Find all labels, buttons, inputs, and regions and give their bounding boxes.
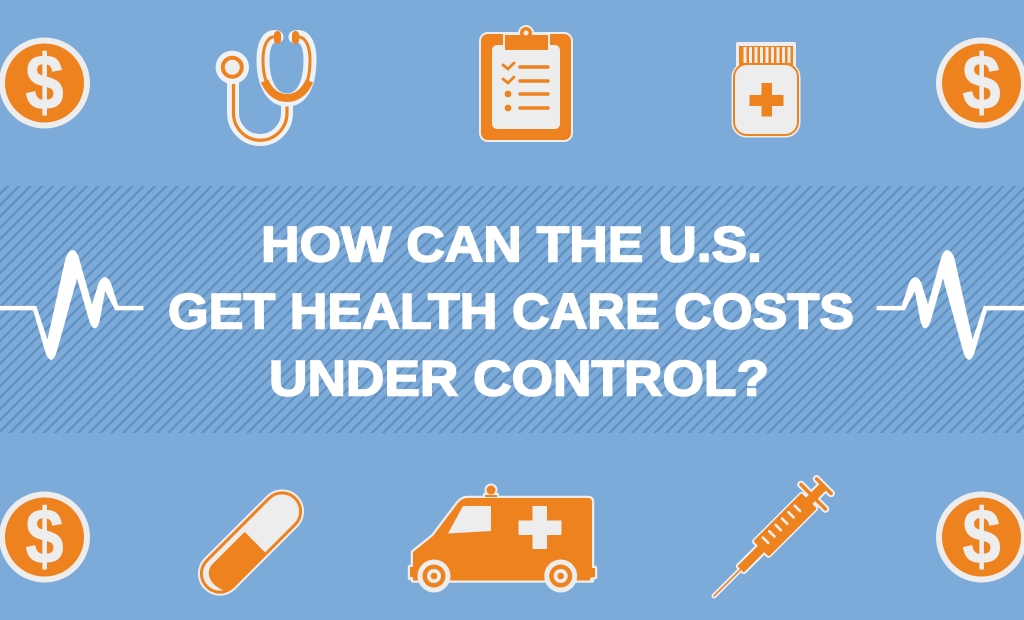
icon: heartbeat line right (877, 250, 1024, 360)
icon: syringe (697, 469, 841, 613)
icon: dollar coin top right (936, 38, 1024, 128)
icon: medicine bottle (732, 42, 800, 138)
icon: dollar coin bottom right: $ (962, 492, 1000, 580)
icon: dollar coin top right: $ (962, 38, 1000, 126)
title: GET HEALTH CARE COSTS (168, 284, 854, 340)
wheel right (544, 560, 577, 592)
icon: stethoscope (216, 31, 310, 140)
striped title band (0, 186, 1024, 433)
icon: dollar coin bottom right (936, 492, 1024, 582)
icon: ambulance (410, 484, 595, 592)
title: HOW CAN THE U.S. (261, 216, 762, 272)
icon: dollar coin top left: $ (26, 38, 64, 126)
icon: dollar coin bottom left (0, 492, 90, 582)
icon: heartbeat line left (0, 250, 143, 360)
icon: dollar coin top left (0, 38, 90, 128)
icon: pill capsule (189, 480, 313, 605)
title (168, 216, 854, 406)
wheel left (418, 560, 450, 592)
icon: dollar coin bottom left: $ (26, 492, 64, 580)
title: UNDER CONTROL? (269, 350, 769, 406)
icon: clipboard checklist (479, 25, 573, 142)
